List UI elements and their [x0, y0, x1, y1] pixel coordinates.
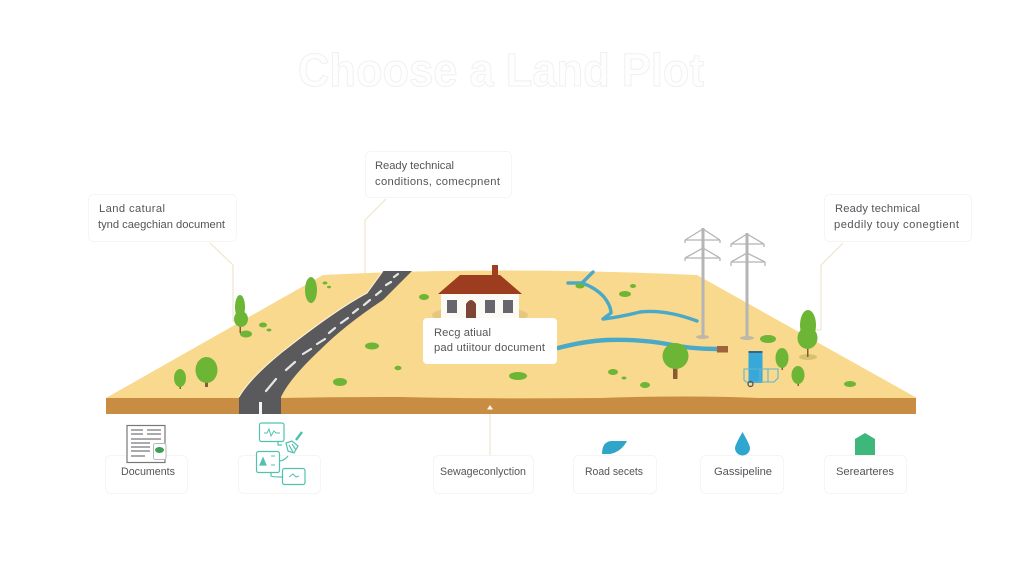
trees [174, 277, 818, 389]
card: documents: Documents [121, 466, 175, 478]
callout: land document: Land catural [99, 203, 165, 215]
water pump [744, 351, 778, 386]
card: gas [700, 432, 784, 494]
land side [106, 390, 916, 414]
callout: technical conditions: Ready technical [375, 160, 454, 172]
side marker [487, 405, 493, 410]
icon: diagrams [256, 423, 305, 484]
card: teal diagram [238, 423, 320, 494]
card: services [824, 433, 906, 494]
card: documents [106, 426, 188, 494]
road [239, 271, 412, 414]
power towers [685, 228, 765, 340]
card: sewage: Sewageconlyction [440, 466, 526, 478]
card: gas: Gassipeline [714, 466, 772, 478]
icon: green box [855, 433, 875, 455]
callout: house document: pad utiitour document [434, 342, 546, 354]
callout: technical connection [824, 194, 972, 242]
icon: leaf [602, 441, 627, 454]
bushes [240, 282, 856, 388]
card: road: Road secets [585, 466, 643, 478]
leader lines [210, 199, 843, 455]
water pipes [558, 272, 717, 349]
land plot [106, 228, 917, 414]
pipe end [717, 346, 728, 352]
callout: technical conditions: conditions, comecpnent [375, 176, 501, 188]
icon: document [127, 426, 166, 462]
callout: land document [88, 194, 236, 242]
callout: house document: Recg atiual [434, 327, 491, 339]
house [432, 265, 528, 324]
title: Choose a Land Plot [298, 44, 704, 96]
land surface [106, 270, 917, 398]
callout: house document [423, 318, 557, 364]
callout: technical connection: Ready techmical [835, 203, 920, 215]
card: services: Serearteres [836, 466, 894, 478]
callout: land document: tynd caegchian document [98, 219, 226, 231]
callout: technical connection: peddily touy conegtient [834, 219, 960, 231]
icon: water drop [735, 432, 750, 456]
callout: technical conditions [366, 152, 512, 198]
card: road [574, 441, 656, 494]
card: sewage [434, 456, 534, 494]
